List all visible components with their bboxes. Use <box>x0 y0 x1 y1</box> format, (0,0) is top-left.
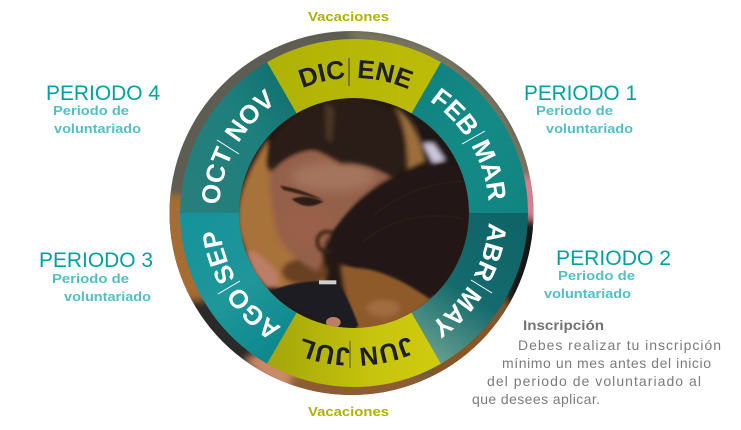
text block: Inscripción: mínimo un mes antes del inicio <box>502 355 711 371</box>
month labels JUN JUL <box>302 338 410 368</box>
ring segment: ABR MAY (teal) <box>412 213 528 364</box>
month labels ABR MAY: MAY <box>436 286 482 339</box>
text block: Periodo 4: Periodo de <box>53 103 129 118</box>
month labels AGO SEP: AGO <box>229 290 281 338</box>
month labels FEB MAR: FEB <box>430 88 477 134</box>
text block: Periodo 4 <box>46 82 160 136</box>
text block: Periodo 3 <box>39 249 153 304</box>
text block: Periodo 3: voluntariado <box>64 289 151 304</box>
photo: woman and child with camera <box>230 95 470 335</box>
label: Vacaciones bottom: Vacaciones <box>308 404 389 419</box>
month labels ABR MAY: ABR <box>474 223 506 281</box>
text block: Periodo 3: Periodo de <box>52 271 129 286</box>
circular photo background <box>160 26 540 405</box>
text block: Inscripción: del periodo de voluntariado al <box>487 373 701 389</box>
text block: Inscripción: Debes realizar tu inscripción <box>518 337 721 353</box>
month labels AGO SEP <box>203 232 281 338</box>
text block: Inscripción: que desees aplicar. <box>472 391 600 407</box>
month labels FEB MAR <box>430 88 506 201</box>
text block: Periodo 3: PERIODO 3 <box>39 249 153 272</box>
month labels ABR MAY <box>436 223 506 339</box>
text block: Periodo 2: Periodo de <box>558 268 635 283</box>
text block: Periodo 1: PERIODO 1 <box>524 82 637 105</box>
ring segment: OCT NOV (teal) <box>180 62 296 213</box>
month labels OCT NOV <box>202 88 271 203</box>
text block: Periodo 1: Periodo de <box>536 103 613 118</box>
text block: Inscripción <box>472 317 721 407</box>
month labels DIC ENE: ENE <box>358 60 414 89</box>
text block: Periodo 2: voluntariado <box>544 286 631 301</box>
text block: Periodo 4: voluntariado <box>54 121 141 136</box>
month labels FEB MAR: MAR <box>472 139 506 201</box>
month labels DIC ENE: DIC <box>298 61 344 88</box>
month labels JUN JUL: JUN <box>360 338 410 366</box>
text block: Inscripción: Inscripción <box>523 317 604 333</box>
text block: Periodo 1: voluntariado <box>546 121 633 136</box>
month labels OCT NOV: NOV <box>224 88 271 142</box>
ring segment: DIC ENE (yellow) <box>267 39 441 113</box>
month labels AGO SEP: SEP <box>203 232 234 284</box>
label: Vacaciones top: Vacaciones <box>308 9 389 24</box>
ring segment: AGO SEP (teal) <box>180 213 296 364</box>
text block: Periodo 2 <box>544 247 671 301</box>
month labels OCT NOV: OCT <box>202 146 231 203</box>
month labels DIC ENE <box>298 58 414 89</box>
month labels JUN JUL: JUL <box>302 338 350 366</box>
ring segment: JUN JUL (yellow) <box>267 313 441 387</box>
ring segment: FEB MAR (teal) <box>412 62 528 213</box>
text block: Periodo 2: PERIODO 2 <box>556 247 671 270</box>
text block: Periodo 4: PERIODO 4 <box>46 82 160 105</box>
text block: Periodo 1 <box>524 82 637 136</box>
